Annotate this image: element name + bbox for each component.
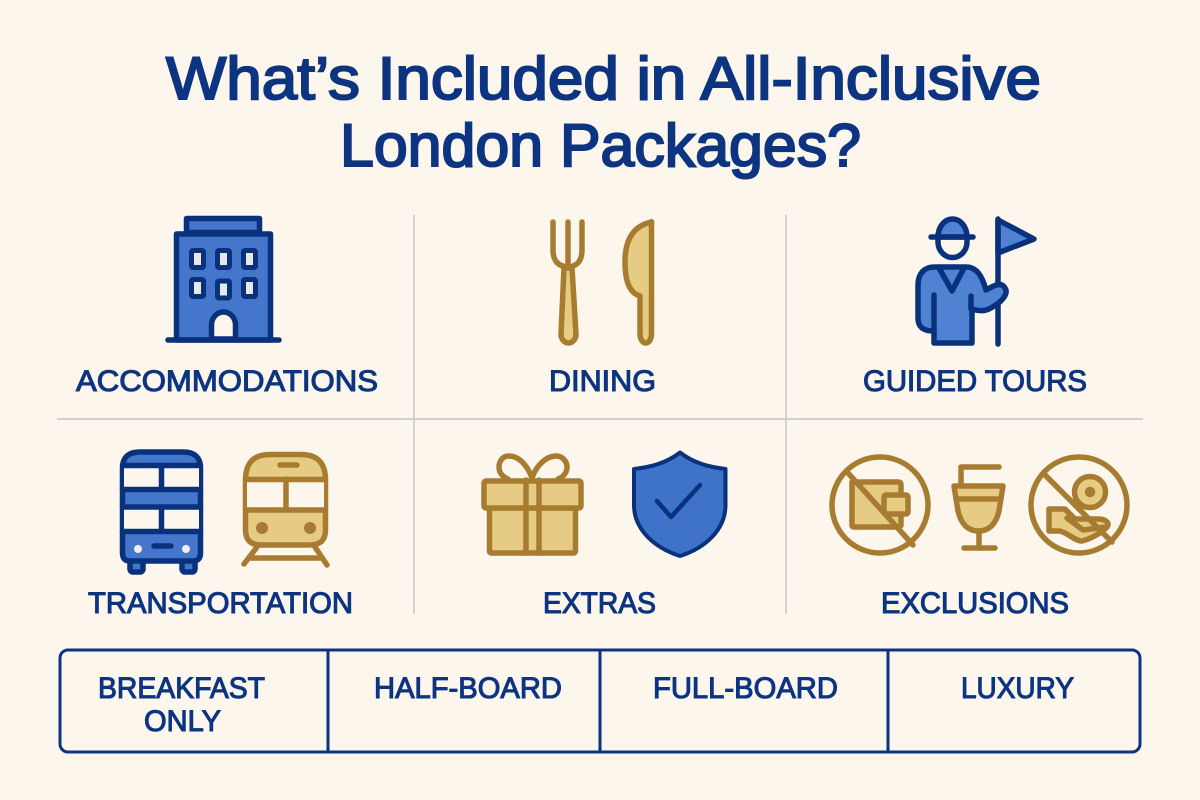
icon: fork and knife xyxy=(553,222,652,343)
panel: guided tours xyxy=(863,219,1087,398)
title: London Packages? xyxy=(340,112,861,179)
label: transportation: TRANSPORTATION xyxy=(88,587,353,620)
panel: extras xyxy=(484,452,726,620)
icon: shield with check xyxy=(634,452,726,556)
panel: accommodations xyxy=(76,218,378,398)
icon: double-decker bus xyxy=(122,452,200,572)
icon: no wallet xyxy=(832,457,928,553)
title xyxy=(166,45,1041,179)
tier: breakfast only xyxy=(98,672,265,738)
icon: no tipping hand xyxy=(1031,457,1127,553)
panel: exclusions xyxy=(832,457,1127,620)
panel: transportation xyxy=(88,452,353,620)
title: What’s Included in All-Inclusive xyxy=(166,45,1041,112)
label: guided tours: GUIDED TOURS xyxy=(863,365,1087,398)
tier: breakfast only: BREAKFAST xyxy=(98,672,265,705)
tier: luxury: LUXURY xyxy=(961,672,1074,705)
label: extras: EXTRAS xyxy=(543,587,656,620)
label: exclusions: EXCLUSIONS xyxy=(881,587,1069,620)
icon: gift box xyxy=(484,456,581,553)
label: dining: DINING xyxy=(549,365,656,398)
icon: drink glass xyxy=(954,467,1003,548)
icon: tour guide with flag xyxy=(918,219,1034,344)
icon: hotel building xyxy=(168,218,279,340)
panel: dining xyxy=(549,222,656,398)
tier: full-board: FULL-BOARD xyxy=(653,672,838,705)
icon: train xyxy=(244,454,327,565)
label: accommodations: ACCOMMODATIONS xyxy=(76,365,378,398)
tier: half-board: HALF-BOARD xyxy=(374,672,562,705)
tier: breakfast only: ONLY xyxy=(144,705,221,738)
panel: package tiers table xyxy=(60,650,1140,752)
